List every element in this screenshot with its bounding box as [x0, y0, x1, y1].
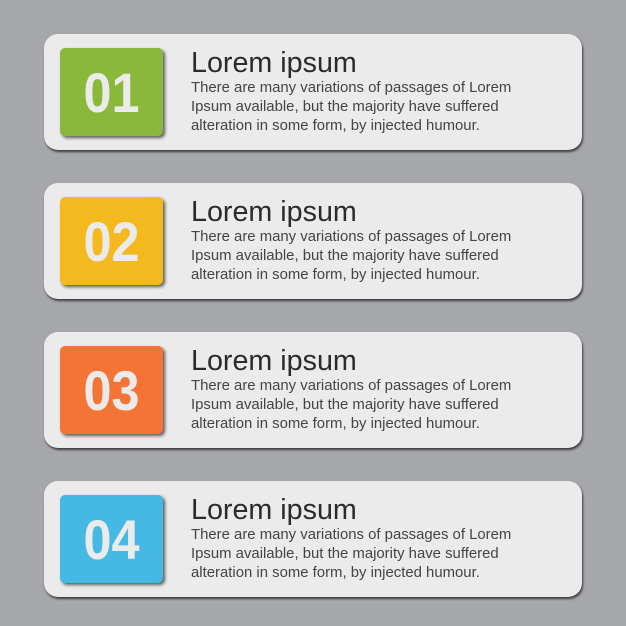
text block 02: Ipsum available, but the majority have suffered: [191, 248, 499, 264]
number badge 01: 01: [83, 61, 139, 124]
panel: item 01: [44, 34, 582, 150]
text block 01: alteration in some form, by injected humour.: [191, 118, 480, 134]
text block 04: There are many variations of passages of Lorem: [191, 527, 511, 543]
text block 01: [191, 80, 511, 134]
text block 02: alteration in some form, by injected humour.: [191, 267, 480, 283]
number badge 04: 04: [83, 508, 139, 571]
panel: item 04: [44, 481, 582, 597]
text block 04: [191, 527, 511, 581]
text block 04: Ipsum available, but the majority have suffered: [191, 546, 499, 562]
text block 03: Ipsum available, but the majority have suffered: [191, 397, 499, 413]
panel: item 02: [44, 183, 582, 299]
number badge 02: [60, 197, 163, 285]
text block 01: Ipsum available, but the majority have suffered: [191, 99, 499, 115]
number badge 02: 02: [83, 210, 139, 273]
heading 03: Lorem ipsum: [191, 345, 357, 377]
text block 01: There are many variations of passages of Lorem: [191, 80, 511, 96]
text block 02: [191, 229, 511, 283]
heading 02: Lorem ipsum: [191, 196, 357, 228]
text block 03: alteration in some form, by injected humour.: [191, 416, 480, 432]
text block 03: There are many variations of passages of Lorem: [191, 378, 511, 394]
number badge 03: [60, 346, 163, 434]
panel: item 03: [44, 332, 582, 448]
text block 03: [191, 378, 511, 432]
number badge 03: 03: [83, 359, 139, 422]
heading 01: Lorem ipsum: [191, 47, 357, 79]
heading 04: Lorem ipsum: [191, 494, 357, 526]
number badge 01: [60, 48, 163, 136]
text block 04: alteration in some form, by injected humour.: [191, 565, 480, 581]
number badge 04: [60, 495, 163, 583]
text block 02: There are many variations of passages of Lorem: [191, 229, 511, 245]
